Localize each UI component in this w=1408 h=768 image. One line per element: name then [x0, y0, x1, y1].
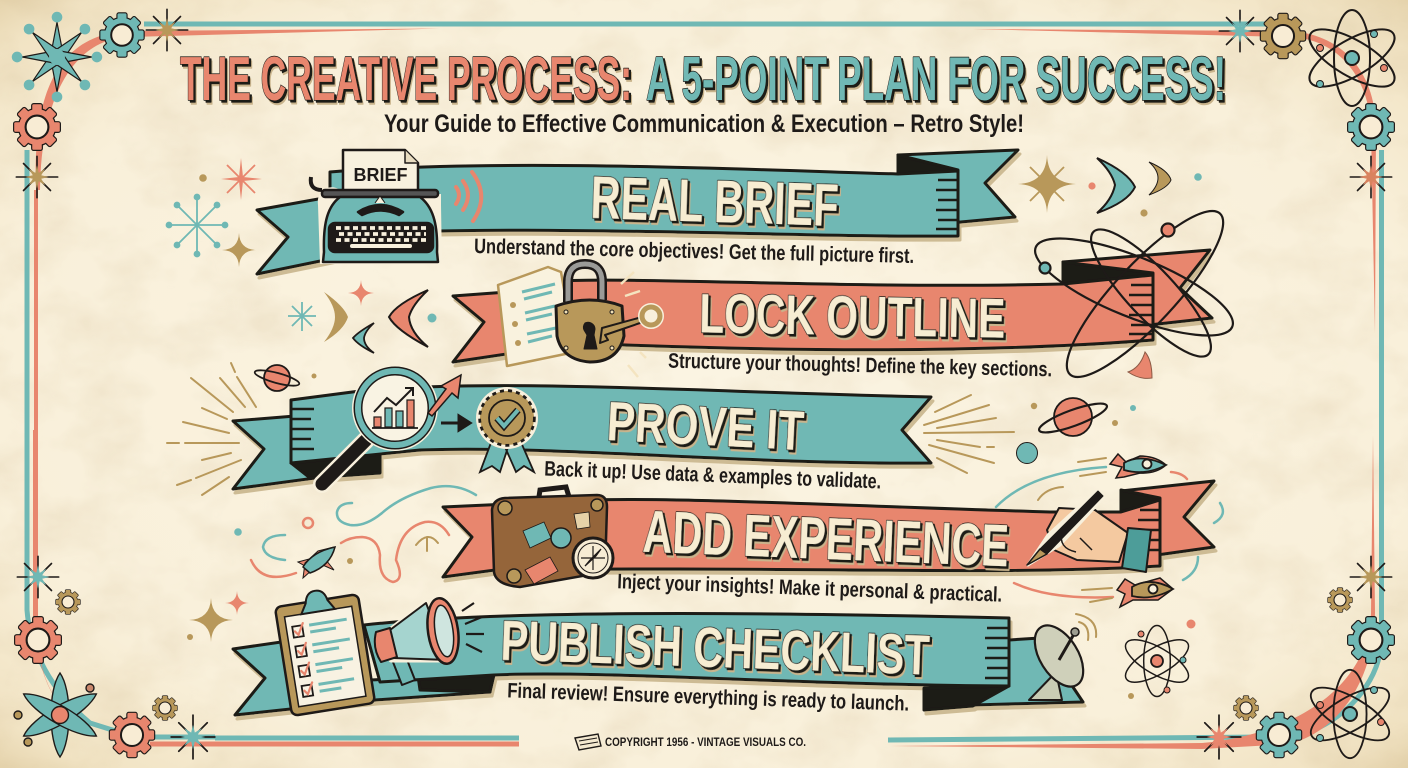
description: step 4: Inject your insights! Make it personal & practical. — [617, 570, 1003, 607]
decor: radiating lines left — [167, 363, 256, 495]
ribbon: teal banner 1 — [257, 150, 1018, 274]
icon: right planet and dots — [1016, 398, 1136, 464]
description: step 3: Back it up! Use data & examples to validate. — [544, 458, 882, 493]
heading: publish checklist: PUBLISH CHECKLIST — [500, 609, 931, 687]
decor: row 2 left shapes — [288, 280, 436, 353]
icon: hand with fountain pen — [1027, 491, 1151, 572]
icon: typewriter — [311, 150, 442, 264]
icon: small arrow — [441, 416, 470, 430]
description: step 1: Understand the core objectives! Get the full picture first. — [474, 235, 914, 268]
icon: clipboard checklist — [273, 584, 375, 716]
decor: radiating lines right — [924, 395, 1014, 473]
ribbon: salmon banner 4 — [443, 481, 1214, 577]
ribbon: teal banner 3 — [233, 386, 931, 489]
icon: left planet — [253, 365, 316, 391]
panel: step 5 publish checklist — [187, 584, 1196, 716]
icon: sound waves — [456, 172, 481, 221]
panel: step 3 prove it — [167, 363, 1136, 495]
icon: magnifying glass with chart — [322, 365, 461, 484]
decor: swirls and rocket left — [234, 486, 476, 582]
big atom over ribbon tail — [1024, 193, 1244, 395]
decor: row 1 right shapes — [1018, 155, 1202, 217]
title: THE CREATIVE PROCESS: — [180, 45, 632, 114]
icon: outline document — [498, 267, 575, 366]
icon: small bell — [1128, 352, 1152, 378]
heading: prove it: PROVE IT — [606, 389, 805, 462]
icon: rosette badge — [476, 387, 538, 472]
footer: copyright — [575, 734, 806, 750]
corner: top-right ornaments — [1219, 10, 1403, 198]
icon: satellite dish — [1025, 614, 1096, 700]
icon: typewriter: BRIEF — [354, 165, 408, 185]
decor: row 5 left sparkles — [187, 591, 249, 642]
decor: rockets with trails — [996, 454, 1223, 607]
icon: suitcase with compass — [492, 487, 613, 587]
icon: megaphone — [375, 596, 484, 685]
heading: real brief: REAL BRIEF — [590, 164, 840, 239]
decor: row 1 left stars — [166, 158, 262, 267]
corner: bottom-right ornaments — [1197, 556, 1397, 759]
description: step 2: Structure your thoughts! Define the key sections. — [668, 350, 1052, 381]
heading: add experience: ADD EXPERIENCE — [642, 499, 1010, 579]
footer: copyright: COPYRIGHT 1956 - VINTAGE VISUALS CO. — [605, 735, 806, 749]
icon: small atom — [1120, 620, 1196, 699]
ribbon: salmon banner 2 — [453, 250, 1212, 362]
subtitle: Your Guide to Effective Communication & Execution – Retro Style! — [384, 110, 1024, 138]
panel: step 4 add experience — [234, 454, 1223, 607]
ribbon: teal banner 5 — [233, 614, 1083, 715]
heading: lock outline: LOCK OUTLINE — [699, 281, 1006, 350]
panel: step 2 lock outline — [166, 155, 1244, 395]
corner: bottom-left ornaments — [14, 556, 215, 759]
corner: top-left ornaments — [12, 9, 188, 198]
panel: step 1 real brief — [257, 150, 1018, 274]
description: step 5: Final review! Ensure everything is ready to launch. — [507, 679, 909, 716]
icon: padlock and key — [556, 264, 661, 377]
